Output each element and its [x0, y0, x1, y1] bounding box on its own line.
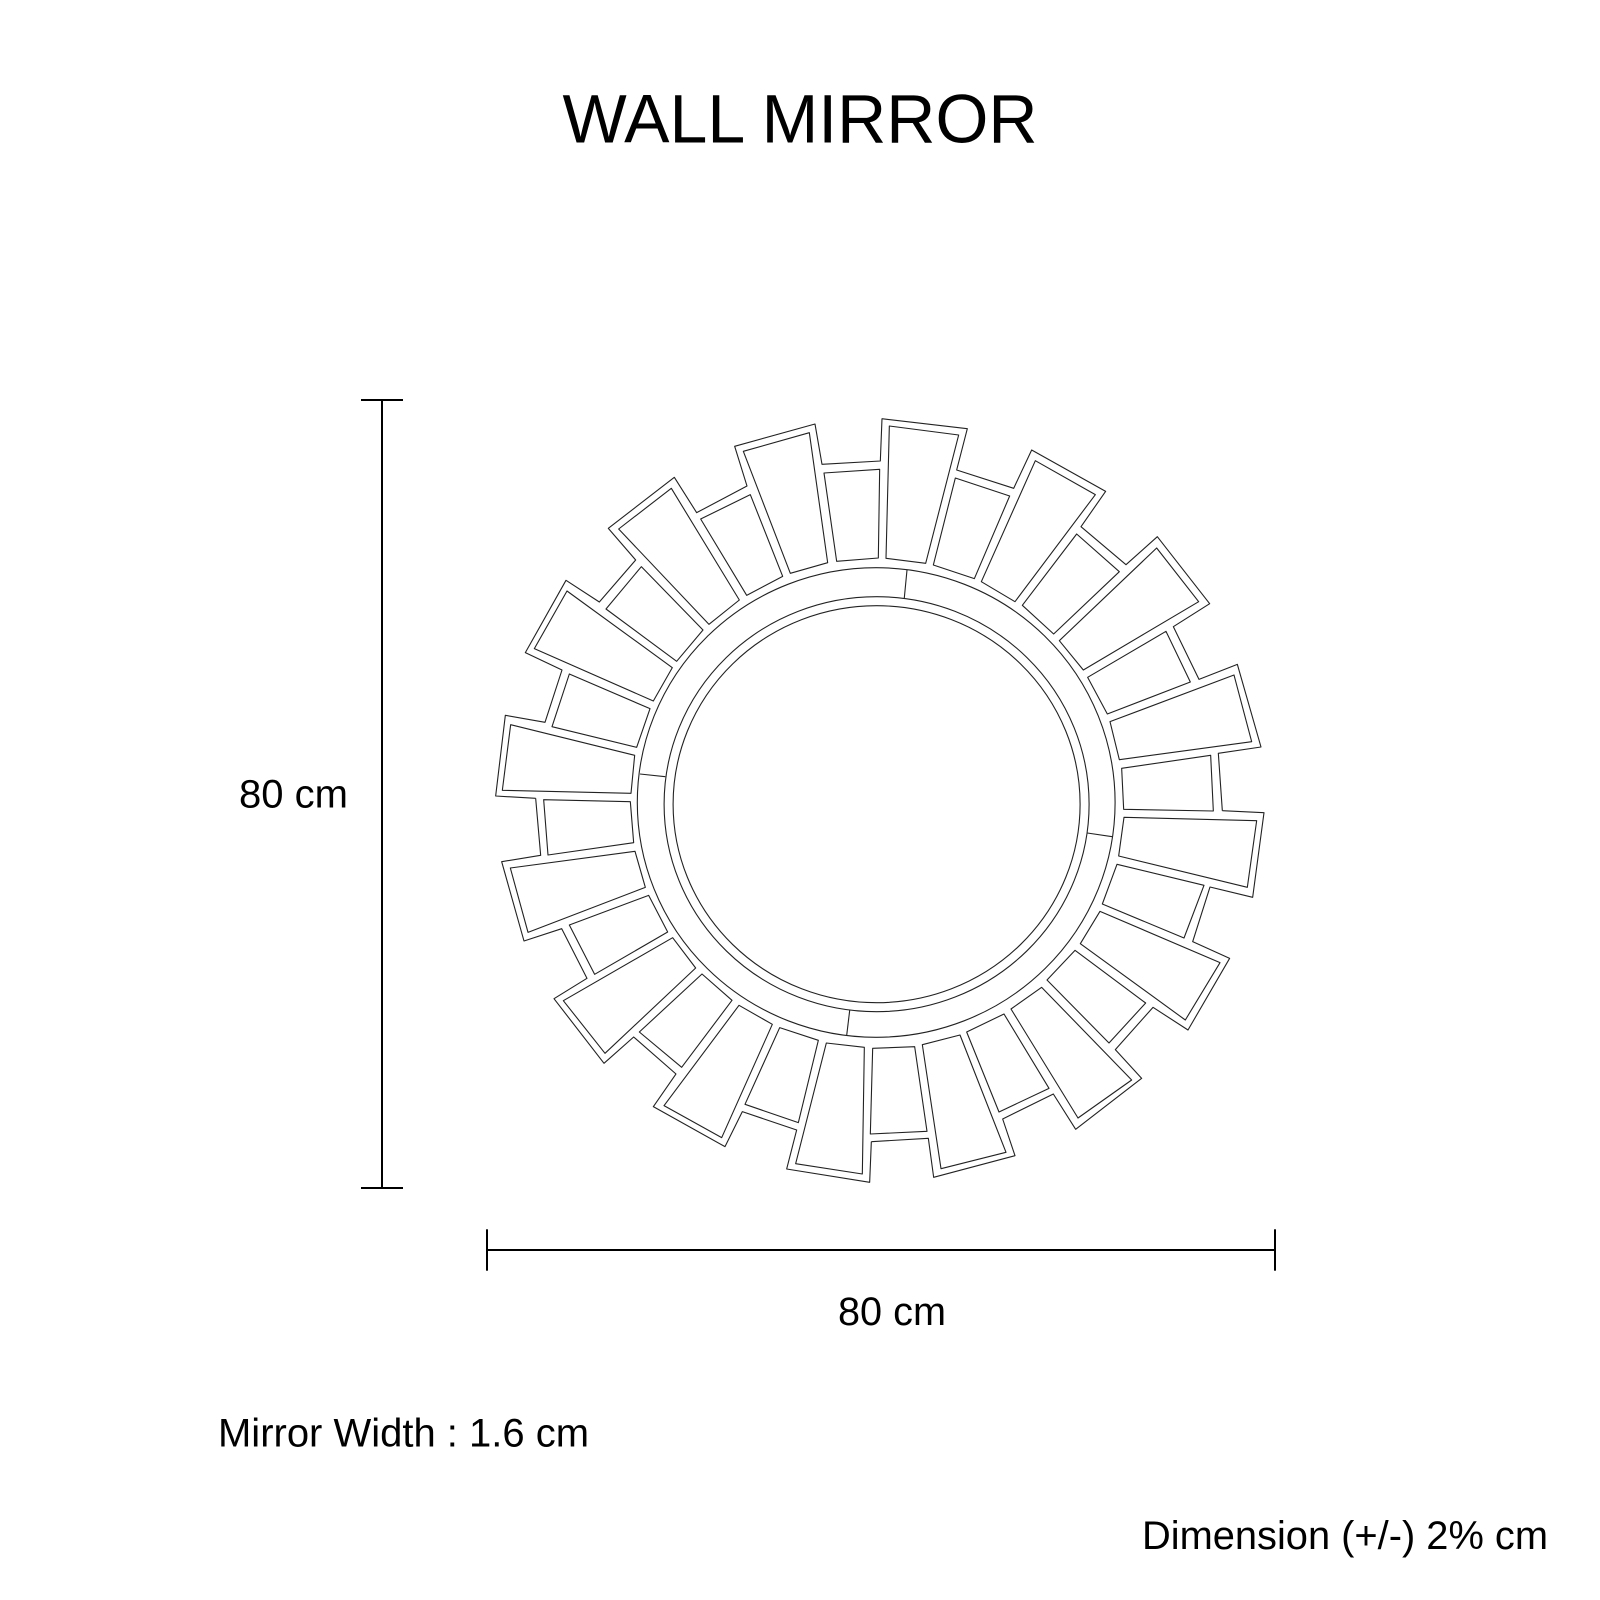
width dimension line: [487, 1229, 1275, 1271]
mirror rings: [637, 568, 1115, 1037]
lower-right tiles and outline: [870, 811, 1264, 1177]
dimension tolerance note: Dimension (+/-) 2% cm: [1142, 1514, 1548, 1558]
lower-left tiles and outline: [502, 798, 871, 1182]
height dimension line: [361, 400, 403, 1188]
upper-left tiles and outline: [496, 419, 882, 798]
mirror drawing: [496, 419, 1264, 1182]
height label: 80 cm: [239, 773, 348, 817]
width label: 80 cm: [838, 1290, 946, 1334]
title: WALL MIRROR: [562, 81, 1038, 158]
upper-right tiles and outline: [882, 419, 1261, 811]
mirror width note: Mirror Width : 1.6 cm: [218, 1412, 589, 1456]
